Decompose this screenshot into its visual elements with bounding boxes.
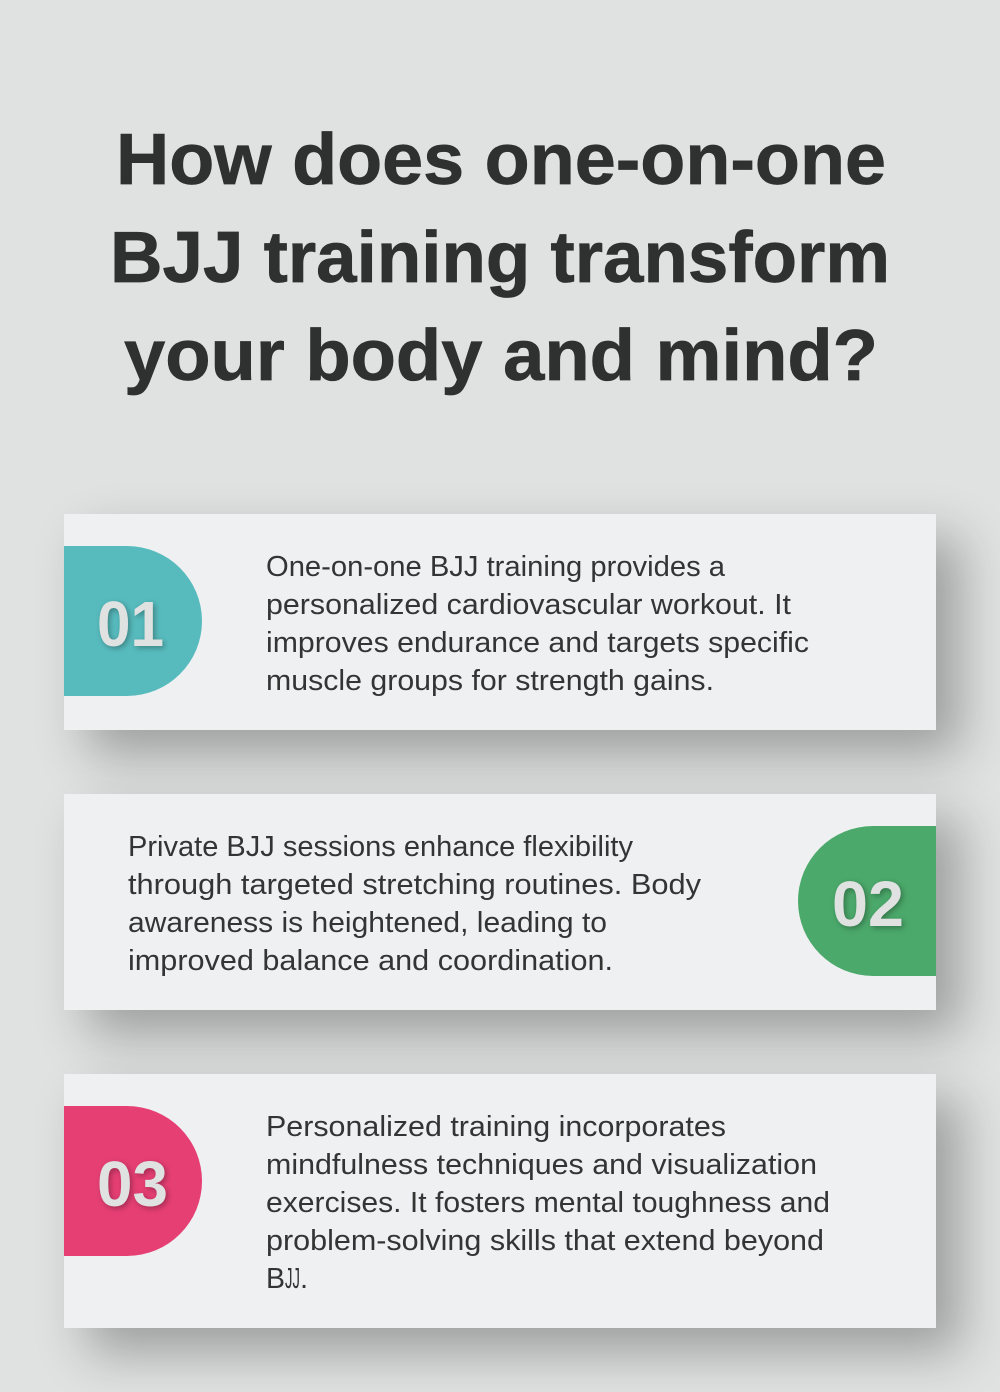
text: step 01 description: personalized cardiovascular workout. It xyxy=(266,589,791,621)
text: step 01 description xyxy=(266,551,809,697)
text: step 03 description: mindfulness techniques and visualization xyxy=(266,1149,817,1181)
title: How does one-on-one xyxy=(116,120,886,200)
badge: 03 xyxy=(64,1106,202,1256)
title: your body and mind? xyxy=(124,316,878,396)
badge: 02 xyxy=(798,826,936,976)
text: step 02 description: awareness is heightened, leading to xyxy=(128,907,607,939)
text: step 03 description xyxy=(266,1111,830,1295)
text: step 02 description xyxy=(128,831,702,977)
title xyxy=(110,120,890,396)
text: step 02 description: through targeted stretching routines. Body xyxy=(128,869,702,901)
text: step 01 description: One-on-one BJJ training provides a xyxy=(266,551,726,583)
badge: 03: 03 xyxy=(97,1148,168,1220)
badge: 01 xyxy=(64,546,202,696)
text: step 02 description: improved balance and coordination. xyxy=(128,945,613,977)
title: BJJ training transform xyxy=(110,218,890,298)
text: step 03 description: Personalized training incorporates xyxy=(266,1111,726,1143)
badge: 02: 02 xyxy=(832,868,904,940)
text: step 03 description: problem-solving skills that extend beyond xyxy=(266,1225,824,1257)
text: step 03 description: BJJ. xyxy=(266,1263,308,1295)
badge: 01: 01 xyxy=(97,588,164,660)
panel: step 02 xyxy=(64,794,936,1010)
text: step 03 description: exercises. It fosters mental toughness and xyxy=(266,1187,830,1219)
panel: step 03 xyxy=(64,1074,936,1328)
text: step 01 description: improves endurance and targets specific xyxy=(266,627,809,659)
panel: step 01 xyxy=(64,514,936,730)
text: step 02 description: Private BJJ sessions enhance flexibility xyxy=(128,831,633,863)
text: step 01 description: muscle groups for strength gains. xyxy=(266,665,714,697)
